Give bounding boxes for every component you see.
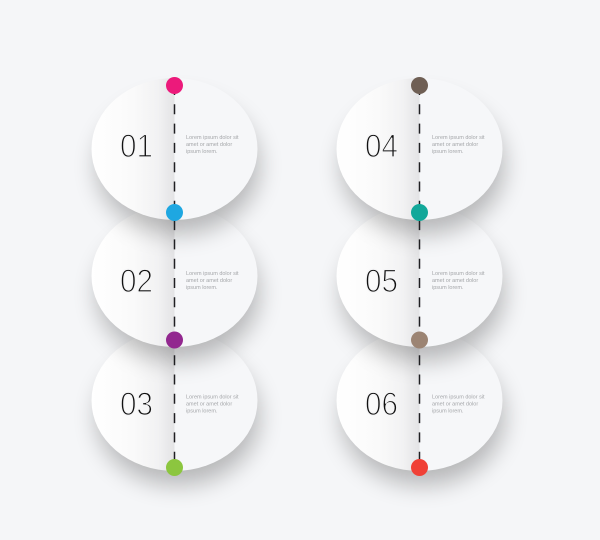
number 03: 03 (120, 386, 153, 422)
number 01: 01 (120, 128, 153, 164)
text block 02: ipsum lorem. (186, 285, 218, 291)
dot: dark brown (411, 77, 428, 94)
text block 06: amet or amet dolor (432, 402, 478, 408)
text block 06: ipsum lorem. (432, 408, 464, 414)
number 05: 05 (365, 263, 398, 299)
number 04: 04 (365, 128, 398, 164)
dot: tan (411, 332, 428, 348)
number 02: 02 (120, 263, 153, 299)
panel: step 02 (92, 205, 259, 361)
dot: teal (411, 204, 428, 221)
text block 05: ipsum lorem. (432, 285, 464, 291)
panel: step 03 (92, 330, 259, 485)
timeline: right column (411, 77, 428, 476)
text block 04: ipsum lorem. (432, 149, 464, 155)
text block 03: ipsum lorem. (186, 408, 218, 414)
text block 02: Lorem ipsum dolor sit (186, 271, 239, 277)
dot: purple (166, 332, 183, 348)
panel: step 06 (336, 330, 504, 485)
text block 04: amet or amet dolor (432, 142, 478, 148)
timeline: left column (166, 77, 183, 476)
text block 03: Lorem ipsum dolor sit (186, 394, 239, 400)
text block 05: Lorem ipsum dolor sit (432, 271, 485, 277)
text block 01: ipsum lorem. (186, 149, 218, 155)
number 06: 06 (365, 386, 398, 422)
text block 01: amet or amet dolor (186, 142, 232, 148)
dot: blue (166, 204, 183, 221)
dot: red (411, 459, 428, 476)
text block 04: Lorem ipsum dolor sit (432, 135, 485, 141)
panel: step 01 (92, 78, 259, 234)
panel: step 04 (336, 78, 504, 234)
text block 06: Lorem ipsum dolor sit (432, 394, 485, 400)
text block 02: amet or amet dolor (186, 278, 232, 284)
text block 01: Lorem ipsum dolor sit (186, 135, 239, 141)
dot: pink (166, 77, 183, 94)
dot: green (166, 459, 183, 476)
text block 03: amet or amet dolor (186, 402, 232, 408)
text block 05: amet or amet dolor (432, 278, 478, 284)
panel: step 05 (336, 205, 504, 361)
